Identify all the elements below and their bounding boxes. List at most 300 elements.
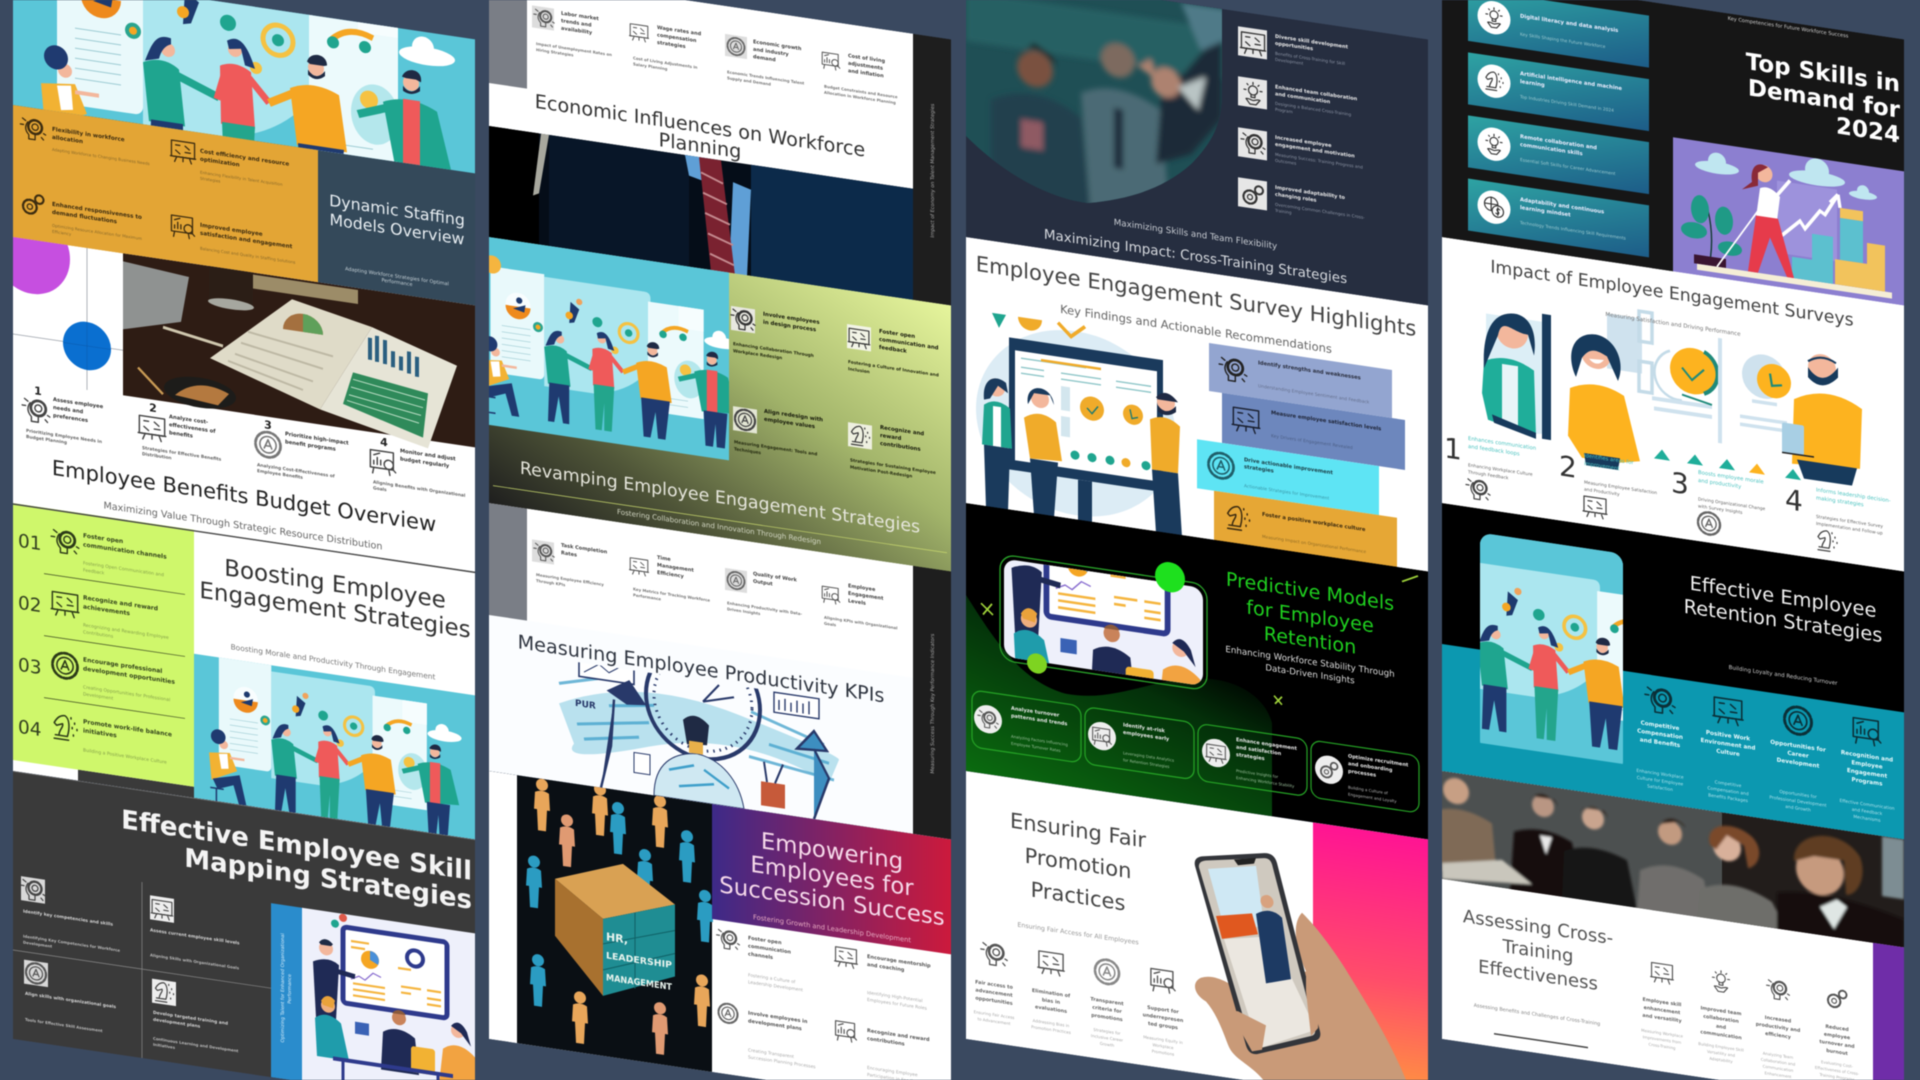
item: cost efficiency: Strategies (200, 176, 220, 184)
column: career: Professional Development (1769, 794, 1827, 809)
card 4: and onboarding (1348, 761, 1393, 774)
item 03: Creating Opportunities for Professional (83, 684, 170, 703)
title: Maximizing Impact: Cross-Training Strategies (1044, 227, 1347, 287)
column: compensation: Compensation (1637, 728, 1683, 741)
card: artificial intelligence: Artificial intelligence and machine (1520, 71, 1622, 92)
item: align: employee values (764, 417, 815, 430)
item: recognize: contributions (880, 441, 921, 453)
item 3: with Survey Insights (1698, 503, 1743, 516)
item: turnover: employee (1824, 1032, 1851, 1041)
slide: Assessing Cross-Training Effectiveness (1437, 770, 1904, 1080)
item: engagement: Goals (824, 621, 837, 627)
item: cost efficiency (169, 138, 290, 186)
title: Models Overview (330, 210, 465, 249)
item: productivity (1756, 978, 1801, 1080)
item: involve (718, 1002, 816, 1070)
card: digital literacy (1468, 0, 1649, 68)
item: cost of living: Cost of living (848, 53, 885, 65)
item: skill enhancement: Cross-Training (1648, 1042, 1676, 1051)
item: productivity: efficiency (1765, 1031, 1792, 1041)
item: team collaboration: and communication (1275, 91, 1331, 105)
item: cost of living (822, 49, 898, 106)
column: environment: Compensation and (1707, 785, 1749, 797)
title: Dynamic Staffing (329, 191, 465, 230)
item: productivity: Increased (1765, 1015, 1792, 1025)
card: adaptability: Technology Trends Influencing Skill Requirements (1519, 220, 1627, 242)
item: engagement: Aligning KPIs with Organizational (824, 615, 898, 631)
item: mentorship: Encourage mentorship (867, 954, 931, 969)
slide: Employee Engagement Survey Highlights (966, 237, 1428, 573)
item: quality: Quality of Work (753, 571, 797, 584)
item 04: Building a Positive Workplace Culture (83, 747, 167, 766)
illustration: team (193, 653, 476, 840)
panel: satisfaction: Measure employee satisfaction levels (1271, 410, 1381, 432)
title: 2024 (1836, 113, 1900, 149)
slide: Impact of Employee Engagement Surveys (1442, 237, 1904, 573)
card: adaptability (1468, 179, 1649, 257)
slide: Maximizing Impact Cross-Training Strategies (966, 0, 1428, 307)
item 4 (368, 437, 466, 498)
title: Employee Benefits Budget Overview (52, 455, 436, 537)
item 3: Driving Organizational Change (1698, 496, 1766, 512)
photo: figures and leadership cube: LEADERSHIP (606, 951, 672, 971)
photo: suit and tie (489, 126, 913, 302)
item: elimination: Elimination of (1032, 988, 1071, 1000)
slide: Revamping Employee Engagement Strategies (438, 217, 951, 573)
illustration: woman and growth chart (1673, 137, 1904, 307)
title: Ensuring Fair (1010, 808, 1146, 853)
card 3 (1198, 723, 1307, 796)
slide: Employee Benefits Budget Overview (0, 208, 475, 573)
title: Effective Employee Skill (121, 805, 472, 887)
item 1: 1 (34, 384, 42, 398)
item: diverse skill: Benefits of Cross-Training for Skill (1275, 51, 1345, 66)
slide: Effective Employee Retention Strategies (1355, 490, 1904, 839)
image frame with meeting illustration (942, 446, 1244, 770)
item 1: 1 (1444, 431, 1462, 467)
item 3: 3 (1671, 466, 1689, 501)
column: career (1769, 703, 1827, 816)
title: Planning (659, 128, 741, 163)
illustration: clock and desk sketch (559, 623, 839, 823)
item: economic growth: Economic Trends Influencing Talent (727, 69, 804, 86)
panel: satisfaction (1222, 393, 1405, 470)
column: recognition: Effective Communication (1839, 798, 1895, 812)
item: responsiveness: Enhanced responsiveness to (52, 202, 142, 221)
item: align: Align redesign with (764, 409, 823, 423)
item: team collaboration (1238, 76, 1358, 124)
item: align: Techniques (734, 446, 761, 456)
item: involve: Involve employees (763, 312, 820, 326)
illustration: team (1355, 494, 1730, 780)
item: responsiveness (21, 194, 142, 240)
photo: figures and leadership cube: HR, (606, 930, 628, 947)
item: recognize: Recognize and (880, 425, 924, 437)
panel: strengths: Understanding Employee Sentiment and Feedback (1258, 383, 1370, 406)
item 03: Encourage professional (83, 656, 162, 675)
item: task completion: Measuring Employee Efficiency (536, 572, 604, 587)
item: skill levels (150, 895, 240, 971)
item: involve: Creating Transparent (748, 1047, 794, 1060)
card: adaptability: learning mindset (1520, 205, 1571, 219)
item 04: Promote work-life balance (83, 718, 172, 739)
card: remote collaboration: Remote collaboration and (1520, 134, 1597, 151)
subtitle: Adapting Workforce Strategies for Optimal (345, 266, 449, 287)
item 2: 2 (1559, 449, 1577, 485)
slide: Measuring Employee Productivity KPIs (489, 503, 951, 839)
item: fair access: to Advancement (978, 1016, 1011, 1026)
item: align skills: Tools for Effective Skill Assessment (25, 1017, 103, 1033)
subtitle: Ensuring Fair Access for All Employees (1017, 922, 1139, 947)
title: Employees for (750, 852, 914, 902)
column: environment: Culture (1716, 749, 1740, 758)
item: transparent: criteria for (1092, 1005, 1122, 1015)
item: productivity: Collaboration and (1761, 1057, 1796, 1067)
sparkles (981, 511, 1418, 725)
item 01: Feedback (83, 567, 105, 577)
item: engagement (822, 579, 898, 637)
column: career: Opportunities for (1770, 740, 1826, 754)
item: wage rates: Wage rates and (657, 25, 702, 37)
item 1: Budget Planning (26, 434, 67, 446)
item: economic growth (725, 34, 804, 92)
subtitle: Key Findings and Actionable Recommendations (1060, 302, 1332, 356)
item: diverse skill: Diverse skill development (1275, 34, 1349, 51)
item 3 (1671, 466, 1766, 543)
card 1: patterns and trends (1011, 713, 1067, 727)
item 1 (1444, 431, 1536, 508)
item: quality: Driven Insights (727, 606, 761, 616)
card 2: for Retention Strategies (1123, 757, 1169, 769)
title: Training (1502, 936, 1573, 967)
photo: people at a meeting (1437, 770, 1904, 949)
card: remote collaboration: communication skills (1520, 142, 1583, 157)
item 02: Recognizing and Rewarding Employee (83, 622, 169, 641)
item: team collaboration: Program (1275, 107, 1293, 114)
card: artificial intelligence (1468, 52, 1649, 131)
item: align skills: Align skills with organizational goals (25, 991, 116, 1010)
item: involve: Involve employees in (748, 1010, 808, 1025)
column: environment: Competitive (1715, 779, 1742, 789)
item: labor market: trends and (561, 18, 592, 29)
item: wage rates: Salary Planning (633, 61, 668, 71)
dark side band (913, 566, 951, 839)
item: competencies: Identify key competencies and skills (23, 909, 113, 928)
item: support: Support for (1147, 1005, 1179, 1016)
photo: budget report on desk (123, 253, 475, 455)
panel: numbered list (13, 503, 194, 787)
title: Effective Employee (1690, 572, 1876, 622)
item: elimination: Addressing Bias in (1033, 1018, 1070, 1028)
subtitle: Measuring Satisfaction and Driving Performance (1605, 312, 1741, 338)
item 1 (20, 386, 104, 446)
item: recognize: Strategies for Sustaining Employee (850, 457, 936, 476)
item: recognize: contributions (867, 1036, 905, 1048)
item: support: Workplace (1153, 1042, 1174, 1050)
card 4: Engagement and Loyalty (1348, 792, 1397, 804)
column: compensation: Satisfaction (1647, 783, 1673, 793)
title: Economic Influences on Workforce (535, 90, 865, 162)
panel: strengths: Identify strengths and weaknesses (1258, 360, 1361, 381)
column: recognition (1839, 716, 1895, 826)
item: mentorship (835, 947, 931, 1012)
photo: figures and leadership cube: MANAGEMENT (606, 973, 673, 993)
item: fair access: Ensuring Fair Access (974, 1009, 1014, 1020)
item: training plans: Develop targeted training and (153, 1010, 228, 1027)
item: time management: Key Metrics for Tracking Workforce (633, 586, 710, 603)
slide: Top Skills in Demand for 2024 (1442, 0, 1904, 307)
item: training plans: development plans (153, 1017, 201, 1030)
item: adaptability: Improved adaptability to (1275, 185, 1346, 201)
item: involve: development plans (748, 1018, 802, 1032)
item: turnover: burnout (1826, 1048, 1848, 1057)
card 3: and satisfaction (1236, 744, 1282, 757)
item: foster (847, 324, 939, 386)
bottom strip (78, 770, 194, 798)
item 2: Strategies for Effective Benefits (142, 445, 222, 463)
item: quality (725, 567, 802, 622)
item: satisfaction: Balancing Cost and Quality in Staffing Solutions (200, 246, 295, 265)
item: engagement: Employee (848, 583, 876, 593)
subtitle: Building Loyalty and Reducing Turnover (1729, 665, 1838, 687)
panel: actionable: Drive actionable improvement (1244, 457, 1333, 476)
item: cost of living: Allocation in Workforce Planning (824, 90, 896, 105)
item: competencies (21, 876, 120, 959)
card: digital literacy: Digital literacy and data analysis (1520, 14, 1618, 34)
illustration: clock and desk sketch: PUR (575, 699, 596, 712)
item: task completion: Rates (561, 550, 577, 559)
item: align skills (24, 960, 116, 1035)
item 01 (18, 528, 167, 577)
background blob (966, 595, 1272, 816)
item: team collaboration (1698, 967, 1744, 1066)
item: transparent: Transparent (1090, 996, 1124, 1007)
item: flexibility: allocation (52, 135, 83, 145)
illustration: survey people (1482, 288, 1862, 506)
column: compensation (1636, 686, 1684, 795)
title: Retention Strategies (1684, 595, 1882, 647)
panel: culture: Foster a positive workplace culture (1262, 512, 1366, 533)
item 01: Foster open (83, 532, 123, 545)
blue band with vertical text (271, 903, 302, 1080)
column 3 (942, 0, 1428, 1080)
item 1: Enhancing Workplace Culture (1468, 462, 1533, 478)
item: support: underrepresen (1143, 1012, 1184, 1024)
item 4: Informs leadership decision- (1816, 487, 1891, 504)
item: recognize (836, 1021, 930, 1080)
item: task completion (532, 538, 608, 594)
item 2: benefits (169, 430, 193, 440)
title: Assessing Cross- (1463, 906, 1613, 949)
illustration: team (438, 217, 763, 465)
item: involve: Workplace Redesign (733, 348, 782, 361)
item: competencies: Development (23, 940, 52, 949)
item: foster: communication (748, 943, 791, 956)
item: responsiveness: demand fluctuations (52, 210, 118, 225)
item: recognize (848, 420, 936, 483)
illustration: phone in hand (1195, 843, 1416, 1080)
column 1 (0, 0, 513, 1080)
item: support: Promotions (1152, 1049, 1174, 1057)
item 2: and Productivity (1584, 487, 1620, 498)
item: quality: Enhancing Productivity with Data- (727, 600, 802, 616)
column: career: and Growth (1785, 804, 1811, 814)
item: engagement: Engagement (848, 591, 884, 602)
card 4: Building a Culture of (1348, 785, 1388, 796)
item: labor market: Hiring Strategies (536, 47, 574, 58)
column: environment: Positive Work (1706, 730, 1750, 743)
column: environment: Environment and (1701, 738, 1755, 752)
title: Predictive Models (1226, 568, 1394, 615)
card: artificial intelligence: learning (1520, 79, 1545, 89)
item: cost efficiency: Enhancing Flexibility in Talent Acquisition (200, 170, 283, 187)
item: skill enhancement: enhancement (1644, 1005, 1681, 1016)
title: Revamping Employee Engagement Strategies (520, 459, 920, 538)
item: foster: Leadership Development (748, 979, 803, 993)
item 4: Aligning Benefits with Organizational (373, 479, 466, 499)
item: engagement: Measuring Success: Training Progress and (1275, 152, 1363, 170)
item 4: Strategies for Effective Survey (1816, 514, 1883, 530)
item 3: and productivity (1698, 478, 1741, 490)
item 03: Development (83, 691, 113, 702)
item 1: Through Feedback (1467, 469, 1509, 481)
title: Boosting Employee (224, 555, 446, 614)
item: foster: Inclusion (848, 366, 870, 375)
item: engagement: Levels (848, 598, 866, 607)
card 4 (1311, 740, 1419, 813)
item 1: Enhances communication (1468, 436, 1536, 452)
item: elimination: evaluations (1035, 1004, 1067, 1015)
item: adaptability: changing roles (1275, 192, 1317, 204)
item: recognize: reward (880, 433, 902, 442)
title: Promotion (1025, 843, 1131, 883)
slide: Economic Influences on Workforce Planning (489, 0, 951, 307)
item: training plans: Continuous Learning and Development (153, 1036, 239, 1053)
item: economic growth: and industry (753, 47, 789, 58)
item: time management: Efficiency (657, 570, 685, 580)
item: turnover: Reduced (1825, 1024, 1849, 1033)
item: labor market: Impact of Unemployment Rates on (536, 41, 612, 57)
card: adaptability: Adaptability and continuous (1520, 197, 1604, 215)
item: fair access: advancement (975, 987, 1013, 999)
panel: benefits (13, 105, 318, 284)
gradient panel (1313, 822, 1428, 1080)
item 2: effectiveness of (169, 422, 216, 435)
column: recognition: Employee (1851, 760, 1883, 771)
panel: strengths (1209, 343, 1392, 418)
blue band with vertical text: Performance (287, 974, 293, 1004)
top rule (13, 504, 475, 572)
item 4 (1785, 483, 1891, 560)
photo: blurred team pointing (966, 0, 1226, 239)
column: compensation: and Benefits (1640, 737, 1681, 749)
panel: teal strip (1442, 644, 1904, 839)
item: engagement: engagement and motivation (1275, 142, 1355, 160)
item: time management: Time (657, 555, 671, 563)
item: foster: Fostering a Culture of (748, 972, 796, 985)
subtitle: Maximizing Skills and Team Flexibility (1114, 218, 1277, 252)
item: recognize: Encouraging Employee (867, 1065, 918, 1078)
card 2: employees early (1123, 730, 1170, 743)
item: align: Measuring Engagement: Tools and (734, 439, 817, 458)
item: fair access: opportunities (975, 995, 1013, 1007)
column: recognition: and Feedback (1852, 807, 1883, 817)
subtitle: Fostering Collaboration and Innovation Through Redesign (617, 507, 821, 546)
slide: Empowering Employees for Succession Success (489, 767, 951, 1080)
item: wage rates (629, 21, 702, 76)
purple band (1873, 943, 1904, 1080)
item: cost of living: adjustments (848, 61, 883, 72)
dark side band (913, 34, 951, 307)
photo: figures and leadership cube (517, 771, 713, 1072)
panel: actionable: strategies (1244, 464, 1274, 475)
title: Effectiveness (1478, 956, 1598, 995)
title: Measuring Employee Productivity KPIs (518, 630, 884, 707)
item: productivity: Communication (1763, 1063, 1794, 1073)
panel: actionable: Actionable Strategies for Improvement (1244, 483, 1329, 502)
item: fair access: Fair access to (975, 979, 1013, 991)
item: foster: Fostering a Culture of Innovation and (848, 359, 939, 379)
item 2: Analyze cost- (169, 414, 208, 426)
title: Demand for (1748, 75, 1901, 124)
item: skill levels: Aligning Skills with Organizational Goals (150, 952, 240, 971)
item: mentorship: Employees for Future Roles (867, 997, 928, 1012)
column: compensation: Culture for Employee (1637, 775, 1684, 788)
card: remote collaboration: Essential Soft Skills for Career Advancement (1520, 157, 1616, 177)
title: Employee Engagement Survey Highlights (976, 252, 1416, 342)
item 2: Distribution (142, 451, 171, 461)
item: foster: communication and (879, 337, 939, 352)
item: diverse skill (1238, 26, 1349, 73)
column 4 (1355, 0, 1904, 1080)
item: economic growth: Supply and Demand (727, 75, 771, 87)
illustration: team handshake (12, 0, 476, 174)
item: adaptability (1238, 177, 1365, 226)
item: diverse skill: opportunities (1275, 41, 1313, 52)
card: artificial intelligence: Top Industries Driving Skill Demand in 2024 (1519, 94, 1614, 114)
item: time management: Performance (633, 592, 661, 602)
item 2: improvement (1584, 461, 1619, 472)
column: environment (1701, 695, 1755, 805)
item: team collaboration: Adaptability (1709, 1056, 1733, 1064)
dark side band: Measuring Success Through Key Performance Indicators (930, 633, 936, 774)
item 3: Prioritize high-impact (285, 431, 349, 447)
card 1: Analyze turnover (1011, 706, 1060, 719)
column: compensation: Enhancing Workplace (1636, 768, 1684, 781)
item 03: development opportunities (83, 665, 175, 686)
item: labor market: Labor market (561, 11, 599, 22)
item: wage rates: compensation (657, 32, 697, 44)
column: career: Development (1777, 758, 1820, 770)
item 01: Fostering Open Communication and (83, 560, 164, 578)
column: career: Career (1787, 751, 1809, 760)
item: team collaboration: Enhanced team collaboration (1275, 84, 1358, 102)
item 03: 03 (18, 655, 42, 679)
item: elimination: bias in (1042, 997, 1061, 1006)
item 3: Boosts employee morale (1698, 470, 1764, 486)
subtitle: Assessing Benefits and Challenges of Cross-Training (1474, 1003, 1600, 1027)
item: turnover: Effectiveness of Cross- (1815, 1065, 1860, 1076)
item: skill enhancement: Measuring Workplace (1641, 1027, 1683, 1039)
subtitle: Enhancing Workforce Stability Through (1225, 645, 1395, 680)
item: turnover: turnover and (1819, 1039, 1855, 1050)
title: Succession Success (719, 872, 945, 931)
item: involve: in design process (763, 320, 816, 333)
item: economic growth: demand (753, 54, 776, 63)
item: foster: Foster open (879, 329, 915, 340)
card 4: processes (1348, 769, 1376, 779)
item: team collaboration: collaboration (1703, 1014, 1739, 1025)
